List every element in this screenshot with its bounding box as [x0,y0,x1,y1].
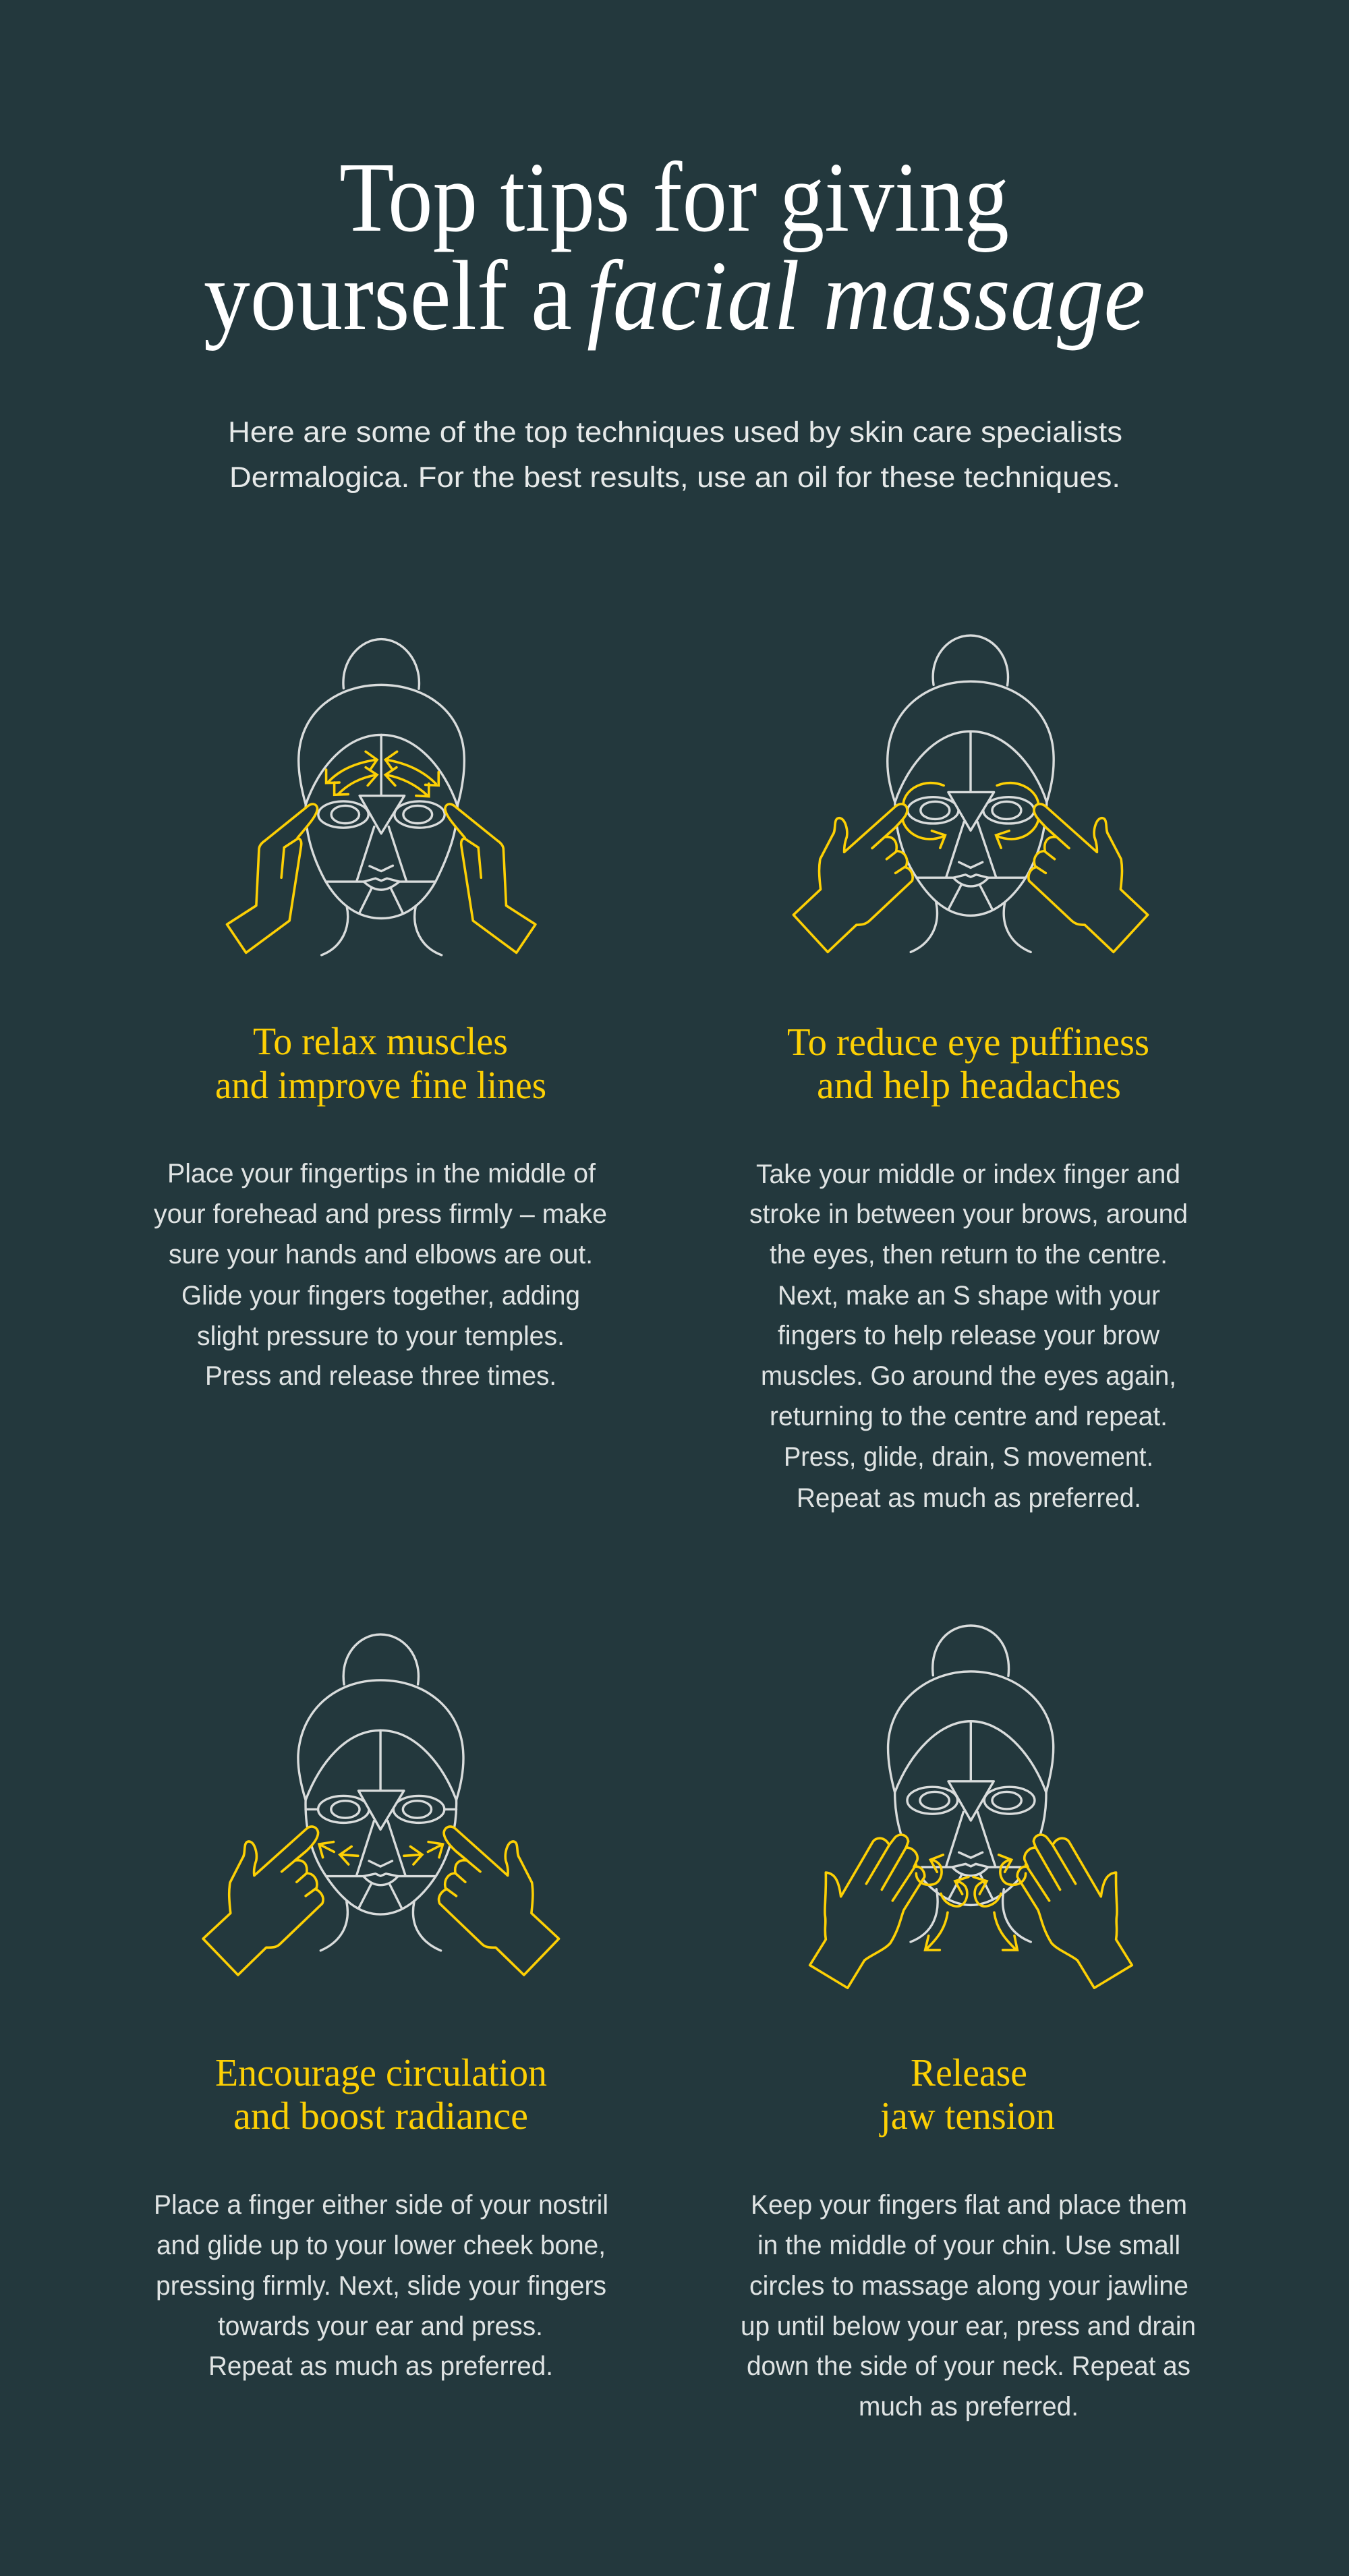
body text: stroke in between your brows, around [749,1199,1188,1229]
body text: Press, glide, drain, S movement. [784,1442,1153,1472]
body text: towards your ear and press. [218,2312,543,2341]
body text: Glide your fingers together, adding [181,1281,580,1311]
icon: face with hands along the jawline [810,1626,1132,1988]
icon: face with fingertips on temples [227,639,536,955]
icon: face with fingers around the eyes [793,635,1148,952]
body text: the eyes, then return to the centre. [770,1240,1168,1269]
body text: Keep your fingers flat and place them [751,2190,1187,2220]
body text: slight pressure to your temples. [197,1321,565,1351]
body text [154,2190,608,2381]
body text [749,1160,1188,1513]
body text [741,2190,1196,2422]
body text: sure your hands and elbows are out. [169,1240,593,1269]
body text: up until below your ear, press and drain [741,2312,1196,2341]
body text [154,1159,607,1391]
heading: To relax muscles [253,1019,508,1063]
head and face lines [888,635,1054,952]
intro text [228,416,1122,494]
body text: Repeat as much as preferred. [797,1483,1141,1513]
body text: returning to the centre and repeat. [770,1402,1168,1431]
heading: and help headaches [817,1063,1121,1107]
head and face lines [299,639,464,955]
body text: pressing firmly. Next, slide your fingers [156,2271,606,2301]
heading: and improve fine lines [215,1063,546,1107]
heading [879,2051,1055,2138]
heading [787,1020,1149,1107]
panel: jaw tension [741,1626,1196,2422]
body text: much as preferred. [859,2392,1079,2422]
body text: down the side of your neck. Repeat as [747,2351,1190,2381]
body text: muscles. Go around the eyes again, [761,1361,1176,1391]
body text: Next, make an S shape with your [778,1281,1160,1311]
heading: jaw tension [879,2094,1055,2138]
body text: Take your middle or index finger and [756,1160,1180,1189]
title: Top tips for giving [339,142,1009,253]
head and face lines [888,1626,1054,1942]
arrows and hands [793,783,1148,952]
body text: in the middle of your chin. Use small [757,2231,1180,2260]
heading: To reduce eye puffiness [787,1020,1149,1064]
heading [215,2051,547,2138]
intro text: Dermalogica. For the best results, use an oil for these techniques. [229,461,1120,494]
body text: fingers to help release your brow [778,1321,1159,1350]
body text: your forehead and press firmly – make [154,1199,607,1229]
title [204,142,1145,351]
title: facial massage [587,241,1145,351]
body text: Press and release three times. [205,1361,556,1391]
hands and circular arrows [810,1835,1132,1988]
arrows and hands [203,1827,559,1975]
heading: and boost radiance [233,2094,528,2138]
body text: and glide up to your lower cheek bone, [156,2231,606,2260]
intro text: Here are some of the top techniques used by skin care specialists [228,416,1122,449]
arrows and hands [227,751,536,952]
head and face lines [298,1634,463,1951]
heading: Encourage circulation [215,2051,547,2094]
heading [215,1019,546,1107]
body text: Repeat as much as preferred. [208,2351,553,2381]
title: yourself a [204,241,572,351]
body text: circles to massage along your jawline [749,2271,1188,2301]
heading: Release [911,2051,1027,2094]
panel: relax muscles [154,639,607,1391]
panel: circulation [154,1634,608,2381]
icon: face with fingers on the cheeks [203,1634,559,1975]
body text: Place a finger either side of your nostril [154,2190,608,2220]
body text: Place your fingertips in the middle of [167,1159,596,1189]
panel: eye puffiness [749,635,1188,1513]
